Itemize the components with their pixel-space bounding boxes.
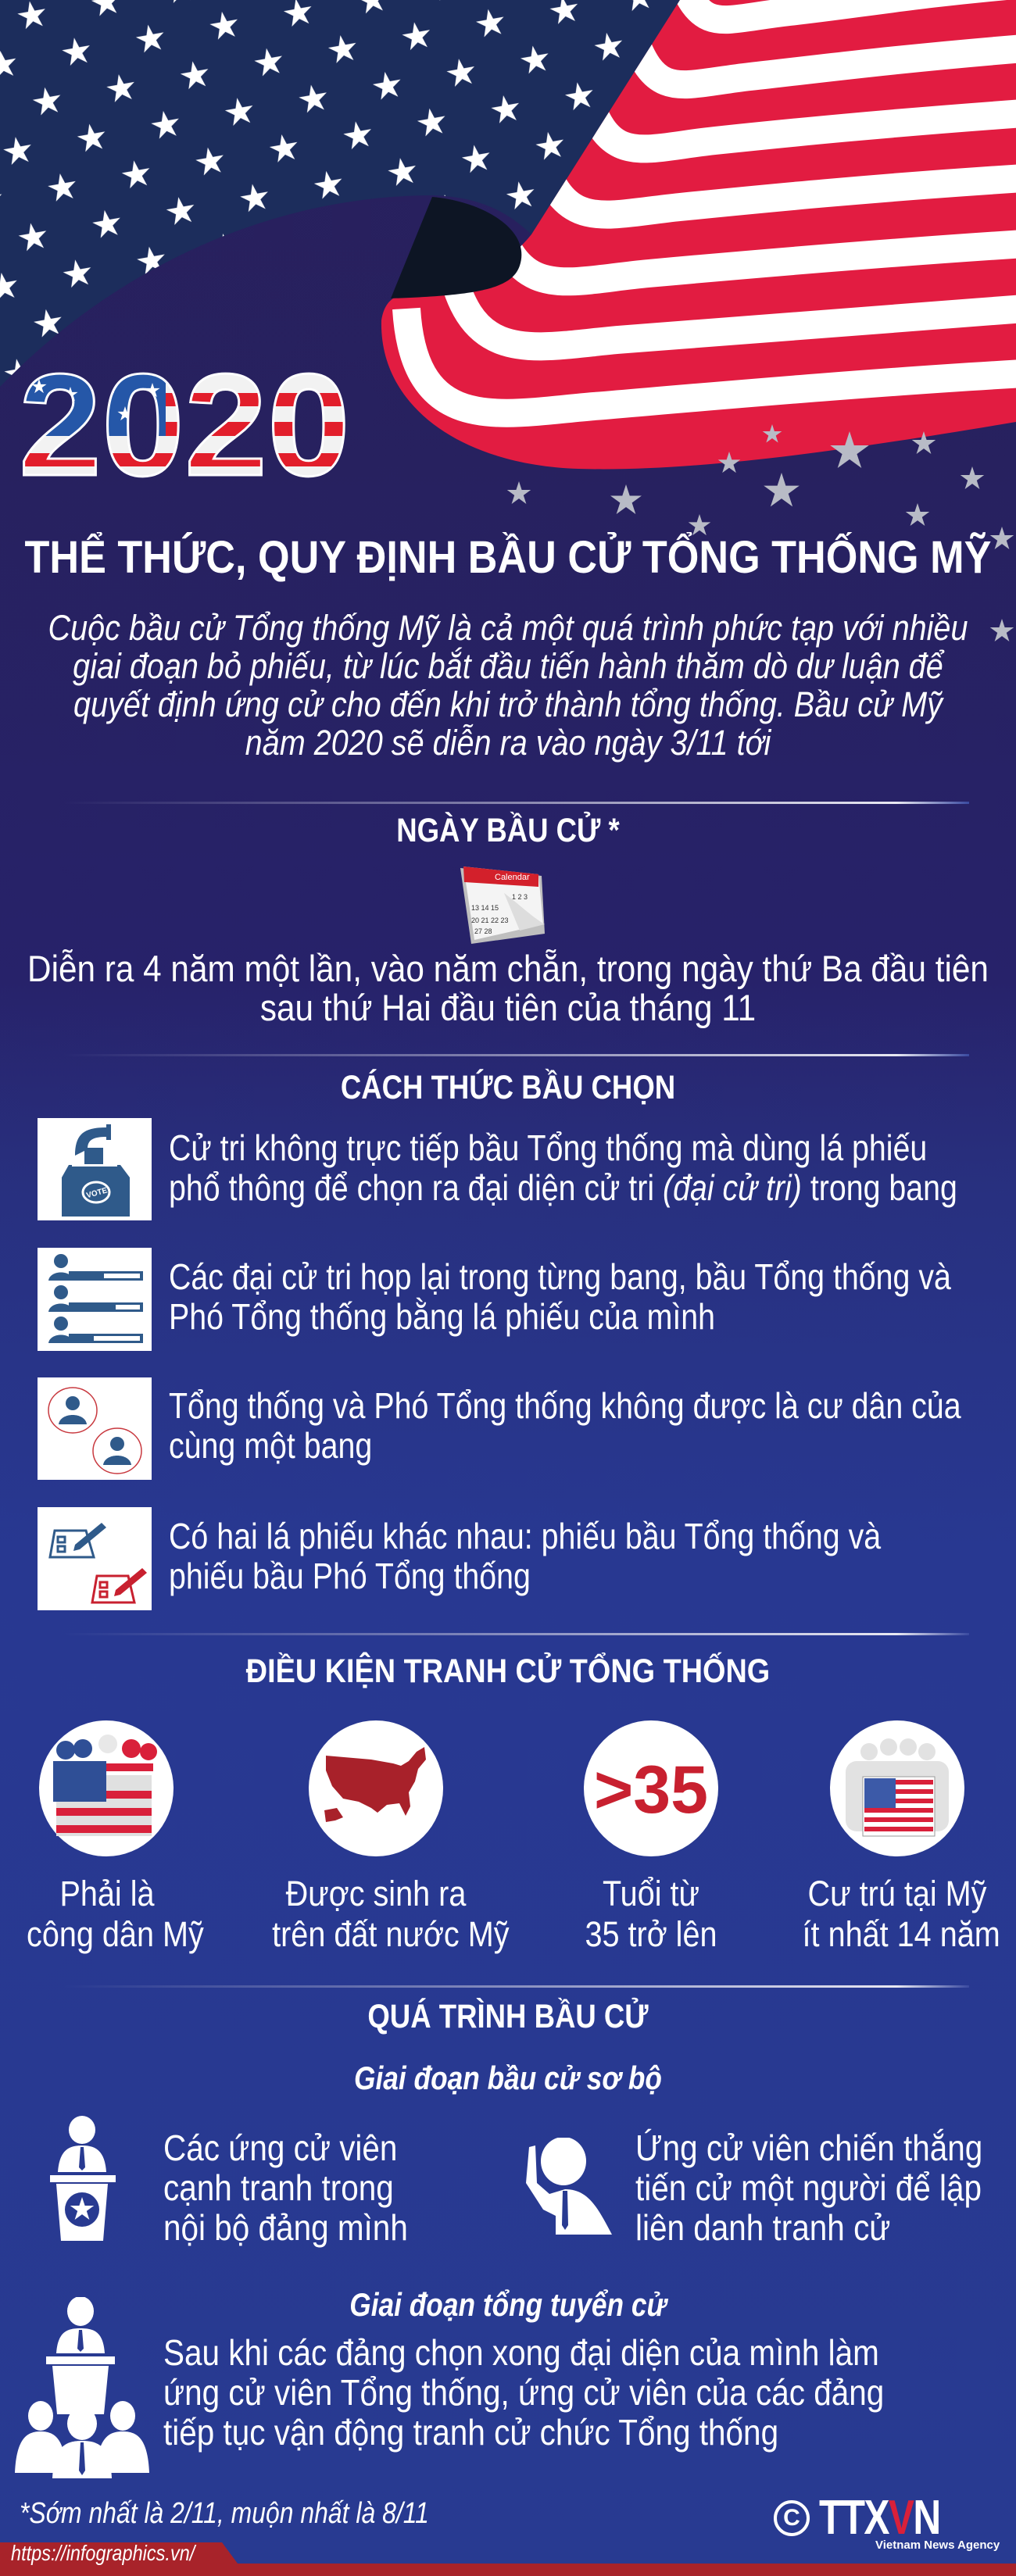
intro paragraph: Cuộc bầu cử Tổng thống Mỹ là cả một quá trình phức tạp với nhiều <box>48 608 968 648</box>
heading: election process: QUÁ TRÌNH BẦU CỬ <box>367 1998 649 2035</box>
label <box>27 1874 204 1954</box>
text: Cử tri không trực tiếp bầu Tổng thống mà dùng lá phiếu <box>169 1127 927 1168</box>
footnote: *Sớm nhất là 2/11, muộn nhất là 8/11 <box>20 2497 429 2530</box>
text: phiếu bầu Phó Tổng thống <box>169 1556 531 1596</box>
text <box>169 1256 951 1337</box>
icon: calendar: 13 14 15 <box>471 904 499 912</box>
condition 1: citizen <box>27 1720 204 1954</box>
text <box>169 1127 957 1208</box>
icon: calendar <box>460 866 545 944</box>
icon: >35 <box>584 1720 718 1856</box>
text: Ứng cử viên chiến thắng <box>635 2128 982 2168</box>
text: Các ứng cử viên <box>163 2128 397 2168</box>
label: công dân Mỹ <box>27 1914 204 1954</box>
text: phổ thông để chọn ra đại diện cử tri (đại cử tri) trong bang <box>169 1167 957 1208</box>
logo: TTXVN <box>774 2491 1000 2552</box>
grey stars <box>507 424 1014 641</box>
heading: eligibility: ĐIỀU KIỆN TRANH CỬ TỔNG THỐNG <box>246 1652 770 1690</box>
primaries left: podium <box>50 2116 408 2248</box>
text: Phó Tổng thống bằng lá phiếu của mình <box>169 1296 715 1337</box>
text: cạnh tranh trong <box>163 2167 394 2208</box>
icon: speaker and audience <box>15 2297 149 2478</box>
text <box>169 1516 882 1596</box>
text: tiến cử một người để lập <box>635 2167 982 2208</box>
text: tiếp tục vận động tranh cử chức Tổng thống <box>163 2412 778 2453</box>
header flag illustration <box>0 0 1016 641</box>
condition 2: born in US <box>272 1720 510 1954</box>
text <box>163 2128 408 2248</box>
label <box>803 1874 1000 1954</box>
text: Sau khi các đảng chọn xong đại diện của mình làm <box>163 2332 879 2373</box>
label: Tuổi từ <box>603 1874 699 1913</box>
condition 3: age <box>584 1720 718 1954</box>
text: Tổng thống và Phó Tổng thống không được là cư dân của <box>169 1385 961 1426</box>
intro paragraph: giai đoạn bỏ phiếu, từ lúc bắt đầu tiến hành thăm dò dư luận để <box>73 646 943 686</box>
intro paragraph: năm 2020 sẽ diễn ra vào ngày 3/11 tới <box>245 723 771 763</box>
url: https://infographics.vn/ <box>11 2541 195 2565</box>
heading: voting method: CÁCH THỨC BẦU CHỌN <box>341 1069 675 1106</box>
icon: ballot box: VOTE <box>85 1186 109 1200</box>
icon: people with flag <box>830 1720 964 1856</box>
text: cùng một bang <box>169 1425 372 1466</box>
subheading: primaries: Giai đoạn bầu cử sơ bộ <box>354 2060 662 2096</box>
election day text: sau thứ Hai đầu tiên của tháng 11 <box>260 987 756 1028</box>
icon: electors list <box>38 1248 152 1351</box>
text: nội bộ đảng mình <box>163 2207 408 2248</box>
election day text: Diễn ra 4 năm một lần, vào năm chẵn, trong ngày thứ Ba đầu tiên <box>27 948 989 989</box>
text: ứng cử viên Tổng thống, ứng cử viên của các đảng <box>163 2372 884 2413</box>
icon: person raising hand <box>526 2138 612 2235</box>
icon: copyright: C <box>783 2505 800 2531</box>
intro paragraph: quyết định ứng cử cho đến khi trở thành tổng thống. Bầu cử Mỹ <box>73 684 943 724</box>
flag canton <box>0 0 680 387</box>
icon: ballot box <box>38 1118 152 1220</box>
item 4: two ballots <box>38 1507 882 1610</box>
icon: calendar: 27 28 <box>474 927 492 935</box>
intro paragraph <box>48 608 968 763</box>
logo: TTXVN: Vietnam News Agency <box>875 2538 1000 2552</box>
label: trên đất nước Mỹ <box>272 1914 510 1954</box>
condition 4: residence <box>803 1720 1000 1954</box>
election day text <box>27 948 989 1028</box>
title: THỂ THỨC, QUY ĐỊNH BẦU CỬ TỔNG THỐNG MỸ <box>25 532 991 583</box>
flag stripes <box>352 0 1016 484</box>
item 2: electors <box>38 1248 951 1351</box>
general election block <box>15 2297 884 2478</box>
label <box>272 1874 510 1954</box>
text <box>635 2128 982 2248</box>
item 1: ballot box <box>38 1118 957 1220</box>
footer bar <box>0 2541 1016 2576</box>
subheading: general election: Giai đoạn tổng tuyển cử <box>349 2286 667 2323</box>
icon: calendar: 1 2 3 <box>512 893 528 901</box>
label: Phải là <box>59 1874 155 1913</box>
wordmark: TTXVN <box>819 2491 940 2545</box>
flag fold <box>391 197 521 298</box>
label: 35 trở lên <box>585 1914 717 1954</box>
text <box>169 1385 961 1466</box>
label: ít nhất 14 năm <box>803 1914 1000 1954</box>
icon: >35: >35 <box>594 1752 708 1827</box>
icon: flag people <box>39 1720 174 1856</box>
heading: election day: NGÀY BẦU CỬ * <box>396 812 620 849</box>
label: Cư trú tại Mỹ <box>808 1874 986 1913</box>
icon: two ballots with pens <box>38 1507 152 1610</box>
primaries right: raised hand <box>526 2128 982 2248</box>
text: liên danh tranh cử <box>635 2207 890 2248</box>
icon: speaker at podium <box>50 2116 116 2241</box>
icon: calendar: 20 21 22 23 <box>471 916 509 924</box>
label <box>585 1874 717 1954</box>
text: Các đại cử tri họp lại trong từng bang, bầu Tổng thống và <box>169 1256 951 1297</box>
text <box>163 2332 884 2453</box>
icon: copyright <box>774 2500 810 2536</box>
label: Được sinh ra <box>286 1874 466 1913</box>
text: Có hai lá phiếu khác nhau: phiếu bầu Tổng thống và <box>169 1516 881 1556</box>
icon: US map <box>309 1720 443 1856</box>
icon: calendar: Calendar <box>495 873 530 882</box>
item 3: residency rule <box>38 1377 961 1480</box>
icon: two people in circles <box>38 1377 152 1480</box>
